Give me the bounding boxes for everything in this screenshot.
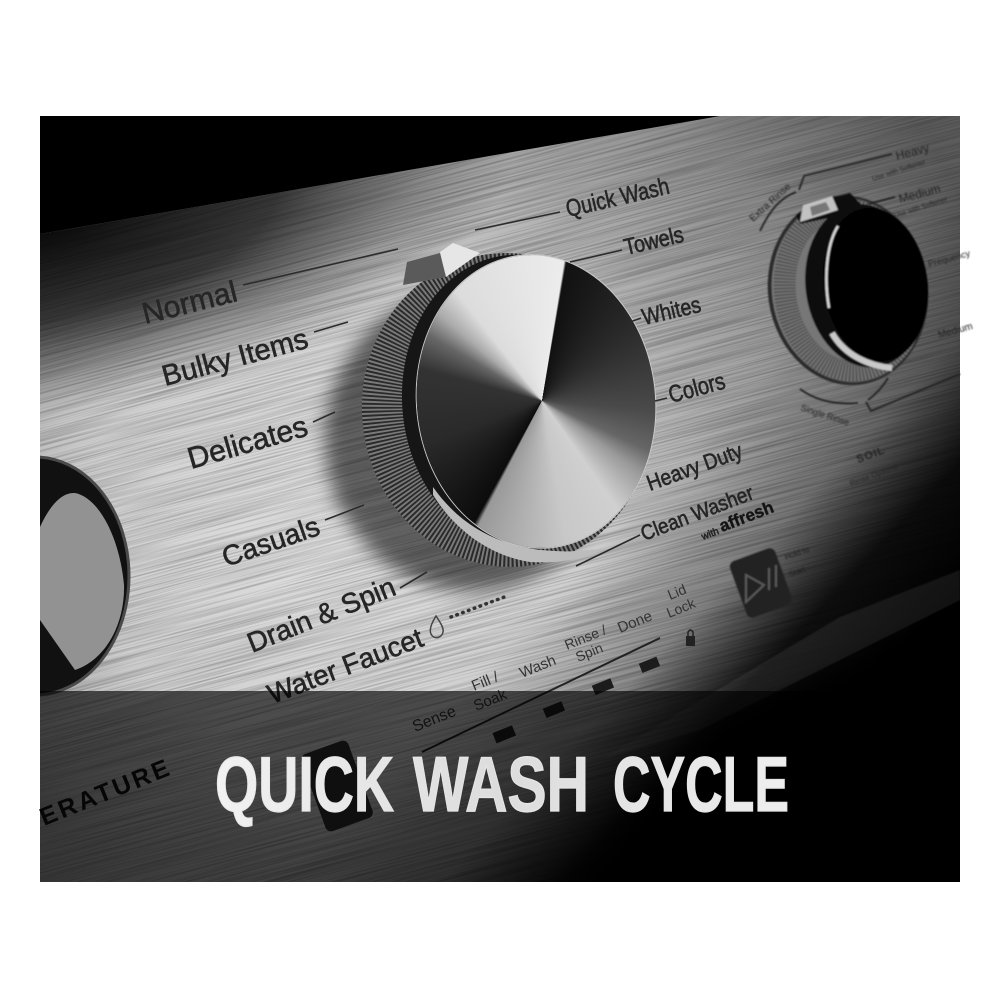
cycle labels around main dial: Drain & Spin [243, 571, 400, 659]
temperature label and button: ERATURE [36, 753, 176, 832]
soil knob labels: Medium [897, 181, 942, 206]
cycle labels around main dial: Casuals [218, 510, 324, 573]
cycle labels around main dial: Normal [139, 275, 241, 331]
status indicators and labels: Rinse / [562, 622, 609, 653]
soil knob labels: Medium [937, 321, 974, 341]
cycle labels around main dial: Quick Wash [563, 172, 672, 222]
start button: Hold to [784, 545, 811, 562]
cycle labels around main dial: affresh [717, 498, 776, 536]
status indicators and labels: Lid [665, 581, 688, 603]
cycle labels around main dial: Whites [639, 292, 703, 330]
soil knob labels: Extra Rinse [748, 181, 794, 224]
soil knob labels: Prequency [927, 248, 972, 269]
dial face: spun metal [402, 243, 670, 560]
cycle labels around main dial: with [699, 526, 721, 543]
title: CYCLE [613, 740, 789, 828]
cycle labels around main dial: Clean Washer [638, 482, 757, 546]
cycle labels around main dial: Delicates [184, 410, 312, 476]
status indicators and labels: Lock [664, 594, 698, 621]
status indicators and labels: Soak [471, 686, 510, 715]
left knob [40, 456, 130, 696]
soil knob labels: Use with Softener [871, 159, 927, 183]
status indicators and labels: Fill / [469, 668, 502, 695]
status indicators and labels: Wash [517, 652, 559, 682]
translucent title band [40, 691, 960, 882]
cycle labels around main dial: Colors [665, 367, 728, 408]
title: WASH [413, 740, 589, 828]
soil knob labels: Single Rinse [799, 402, 851, 428]
cycle labels around main dial: Bulky Items [159, 323, 312, 393]
photo background: brushed steel control panel [40, 116, 960, 882]
cycle labels around main dial: Water Faucet [263, 622, 428, 710]
pointer [403, 253, 446, 285]
title: QUICK [215, 740, 394, 828]
cycle labels around main dial: Heavy Duty [643, 439, 746, 496]
status indicators and labels: Sense [410, 703, 459, 736]
status indicators and labels: Spin [573, 639, 605, 665]
soil knob labels: SOIL [855, 444, 887, 466]
soil knob labels: Rinse Options [849, 462, 899, 488]
status indicators and labels: Done [615, 608, 655, 637]
start button: Start [788, 564, 807, 579]
soil knob labels: Use with Softener [893, 196, 949, 220]
cycle labels around main dial: Towels [621, 222, 686, 260]
soil knob labels: Heavy [894, 141, 931, 163]
